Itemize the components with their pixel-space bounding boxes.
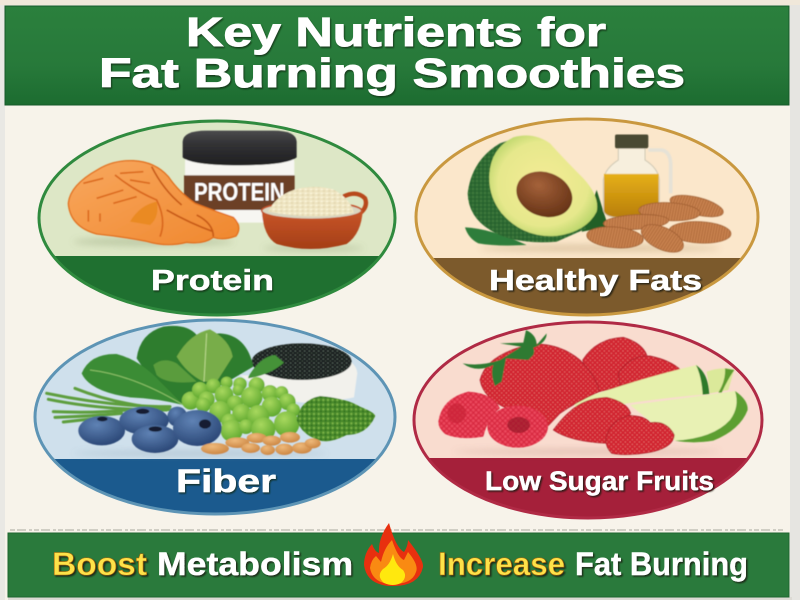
icon: almonds: [586, 191, 732, 258]
icon: back raspberries: [583, 337, 681, 392]
icon: avocado: [465, 135, 608, 246]
icon: protein jar: PROTEIN: [194, 179, 285, 207]
footer text: boost metabolism: Boost: [52, 546, 147, 582]
protein label band: [55, 256, 379, 314]
icon: bowl of protein: [262, 187, 366, 249]
title text: Fat Burning Smoothies: [99, 50, 685, 96]
icons: fiber foods: [47, 326, 375, 456]
icon: peas: [182, 377, 300, 442]
fruits label: Low Sugar Fruits: [485, 466, 714, 496]
icon: raspberries: [438, 392, 548, 448]
fiber label band: [54, 459, 376, 512]
footer text: increase fat burning: Fat Burning: [575, 546, 748, 582]
icon: protein jar: [183, 131, 297, 223]
icon: leafy greens: [82, 326, 284, 405]
icon: blueberries: [78, 407, 222, 453]
icons: protein foods: [68, 131, 366, 252]
icon: flame: [364, 523, 423, 586]
title text: Key Nutrients for: [186, 9, 606, 55]
icon: strawberry: [463, 330, 599, 427]
footer text: boost metabolism: Metabolism: [157, 546, 353, 582]
icon: bowl of seeds: [240, 343, 357, 403]
panel: fiber: [30, 320, 400, 519]
footer text: increase fat burning: [438, 546, 748, 582]
panel: protein: [30, 121, 410, 326]
protein label: Protein: [151, 265, 274, 297]
panel: healthy fats: [410, 119, 760, 318]
icons: fruits: [438, 330, 748, 455]
footer banner: [8, 523, 789, 597]
icon: green beans: [47, 388, 173, 422]
panel: low sugar fruits: [410, 322, 770, 523]
title text: [99, 9, 685, 96]
icon: apple slices: [575, 365, 748, 442]
icons: fat foods: [465, 134, 732, 258]
healthy fats label band: [434, 258, 740, 314]
fruits label band: [430, 458, 746, 516]
footer text: boost metabolism: [52, 546, 353, 582]
icon: nuts: [201, 432, 321, 455]
healthy fats label: Healthy Fats: [489, 265, 702, 297]
icon: olive oil jar: [603, 134, 671, 217]
footer text: increase fat burning: Increase: [438, 546, 565, 582]
fiber label: Fiber: [176, 463, 276, 499]
title banner: [5, 6, 789, 105]
icon: parsley: [297, 396, 375, 441]
icon: chicken breast: [68, 161, 239, 245]
icon: front strawberries: [553, 397, 674, 455]
